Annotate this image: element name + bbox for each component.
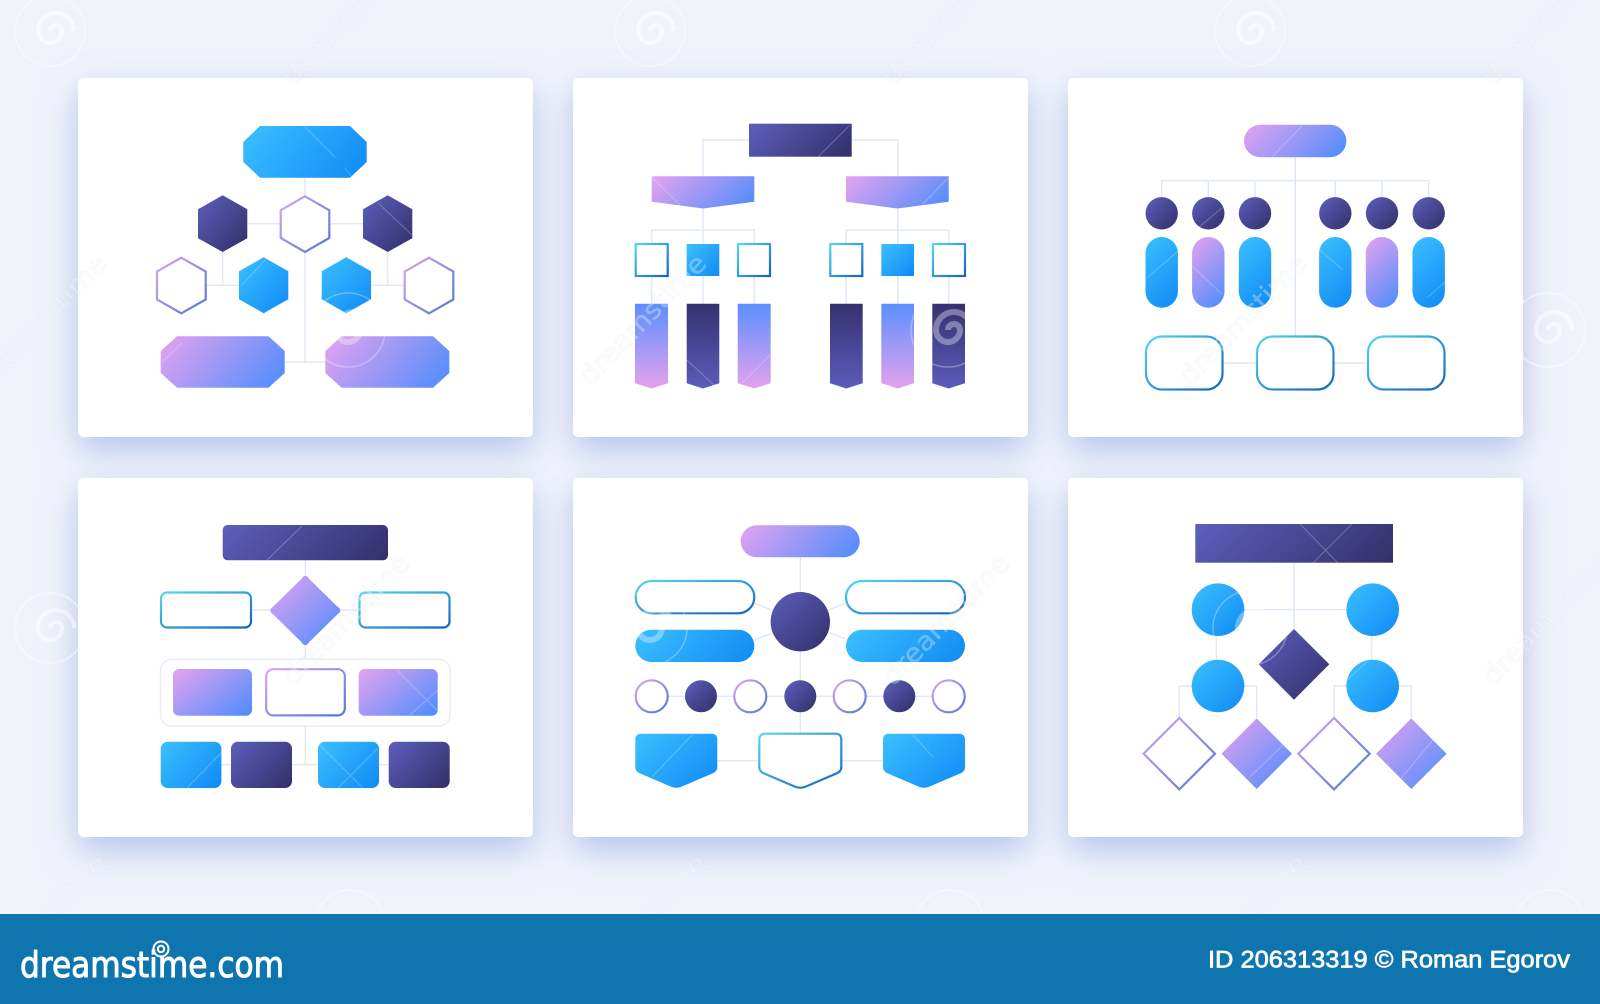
top pill (741, 525, 860, 557)
watermark text: dreamstime (1173, 849, 1313, 992)
pentagon shapes (635, 734, 965, 788)
top rectangle (223, 525, 388, 560)
hub circle (771, 592, 830, 651)
blue circles (1192, 583, 1399, 712)
hexagon row one (198, 195, 412, 252)
watermark text: dreamstime (276, 549, 416, 692)
bottom octagons (161, 336, 449, 388)
watermark streaks (162, 125, 1445, 788)
square boxes (636, 244, 965, 276)
bottom diamonds (1144, 718, 1447, 789)
connector lines (652, 140, 949, 304)
decision diamond (270, 576, 340, 645)
bottom boxes (161, 742, 450, 788)
top octagon (243, 126, 367, 178)
panel: decision flowchart (78, 478, 533, 837)
watermark text: dreamstime (876, 549, 1016, 692)
circles row (636, 680, 965, 712)
outlined boxes (1146, 336, 1444, 390)
panel: hexagon flowchart (78, 78, 533, 437)
panel: diamond flowchart (1068, 478, 1523, 837)
panel: hub flowchart (573, 478, 1028, 837)
outlined pills (636, 581, 965, 613)
watermark text: dreamstime (573, 249, 713, 392)
top pill (1244, 125, 1346, 157)
centre diamond (1259, 629, 1329, 700)
footer bar (0, 914, 1600, 1004)
chevron headers (652, 176, 949, 208)
connector lines (221, 560, 389, 765)
connector lines (1179, 562, 1411, 718)
connector lines (1162, 157, 1429, 363)
top rectangle (1195, 524, 1393, 563)
icon: logo spiral (154, 942, 168, 956)
panel: pill flowchart (1068, 78, 1523, 437)
container with three boxes (160, 659, 450, 726)
top rectangle (749, 124, 852, 157)
footer logo text: dreamstime.com (20, 945, 284, 986)
filled pills (635, 630, 965, 662)
connector lines (206, 177, 404, 362)
hexagon row two (157, 257, 453, 313)
watermark text: dreamstime (1173, 249, 1313, 392)
footer credit: ID 206313319 © Roman Egorov (1208, 946, 1570, 974)
outlined side boxes (161, 592, 450, 628)
vertical pills (1146, 237, 1445, 308)
connector lines (652, 557, 949, 761)
vertical banners (635, 304, 965, 388)
circles row (1146, 197, 1445, 230)
panel: banner flowchart (573, 78, 1028, 437)
watermark text: dreamstime (573, 849, 713, 992)
